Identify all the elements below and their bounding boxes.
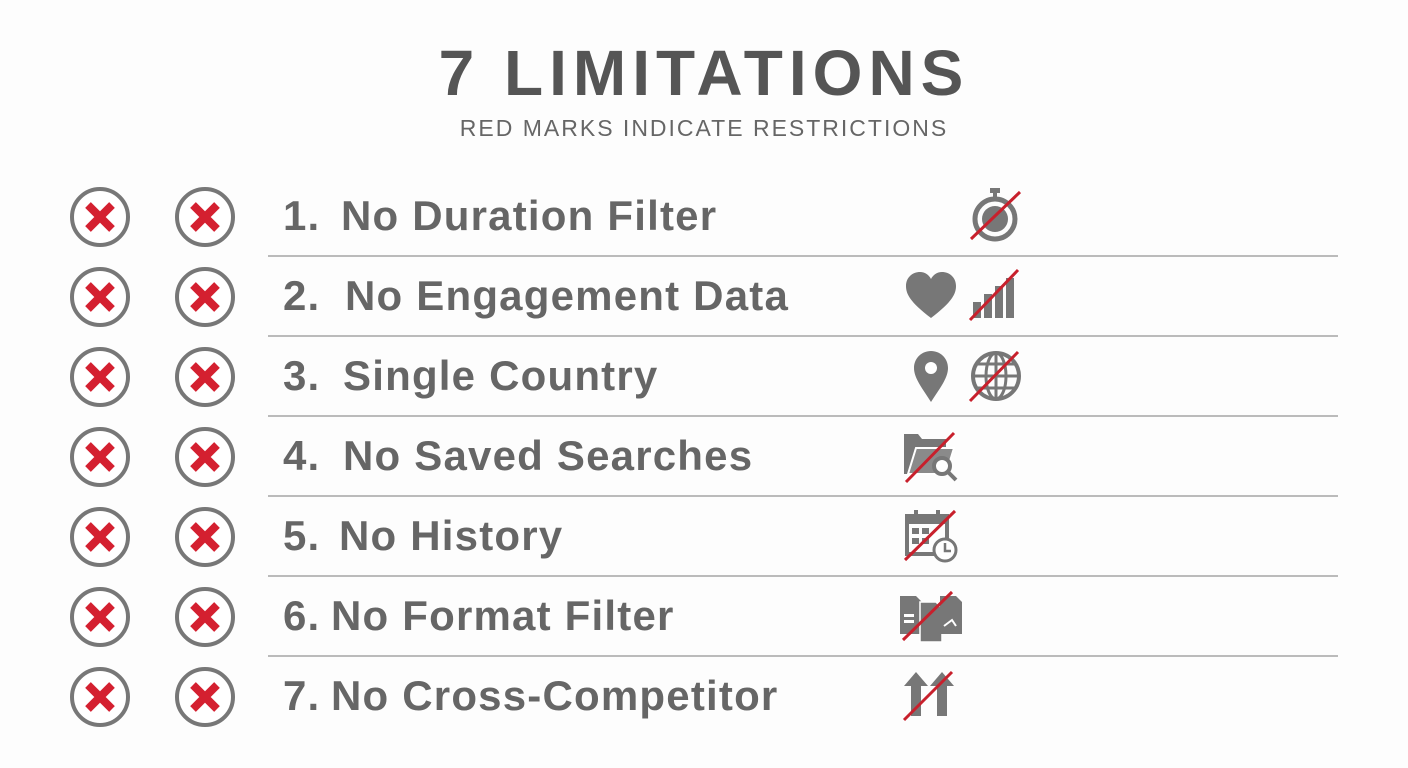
icon: up arrows crossed bbox=[903, 671, 954, 721]
row 2: No Engagement Data bbox=[345, 272, 789, 319]
row 6: No Format Filter bbox=[331, 592, 675, 639]
row 5: No History bbox=[339, 512, 563, 559]
row 4 bbox=[70, 427, 958, 487]
icon: calendar clock crossed bbox=[904, 510, 958, 562]
row 2: 2. bbox=[283, 272, 320, 319]
row 1 bbox=[70, 187, 1021, 247]
row 1: 1. bbox=[283, 192, 320, 239]
row 7: 7. bbox=[283, 672, 320, 719]
row 6: 6. bbox=[283, 592, 320, 639]
icons: pin and globe crossed bbox=[914, 351, 1021, 402]
row 3: 3. bbox=[283, 352, 320, 399]
row 4: 4. bbox=[283, 432, 320, 479]
row 7: No Cross-Competitor bbox=[331, 672, 778, 719]
icons: heart and bars crossed bbox=[906, 269, 1019, 321]
icon: stopwatch crossed bbox=[970, 188, 1021, 242]
row 1: No Duration Filter bbox=[341, 192, 717, 239]
row 4: No Saved Searches bbox=[343, 432, 753, 479]
icon: file formats crossed bbox=[900, 590, 962, 642]
row 2 bbox=[70, 267, 1019, 327]
row 6 bbox=[70, 587, 962, 647]
row 5: 5. bbox=[283, 512, 320, 559]
row 3: Single Country bbox=[343, 352, 658, 399]
subtitle: RED MARKS INDICATE RESTRICTIONS bbox=[460, 115, 948, 141]
row 5 bbox=[70, 507, 958, 567]
row 7 bbox=[70, 667, 954, 727]
icon: folder search crossed bbox=[904, 432, 958, 483]
title: 7 LIMITATIONS bbox=[439, 37, 969, 109]
row 3 bbox=[70, 347, 1021, 407]
